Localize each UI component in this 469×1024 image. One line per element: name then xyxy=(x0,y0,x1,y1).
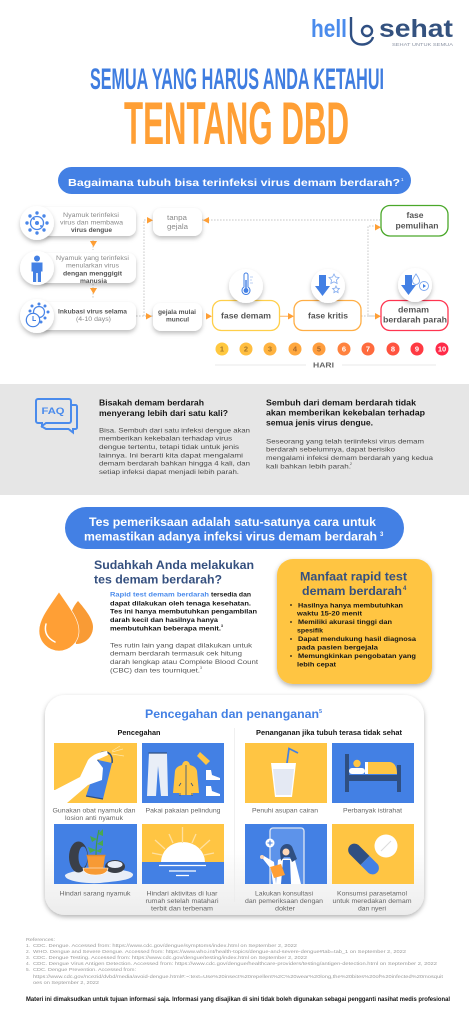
panel: manfaat rapid test: Memungkinkan pengobatan yang xyxy=(298,653,416,660)
text: rapid test: (CBC) dan tes tourniquet. xyxy=(110,668,200,674)
icon: thermometer xyxy=(229,269,263,303)
box: gejala mulai muncul: muncul xyxy=(166,316,189,324)
text: right statement: akan memberikan kekebalan terhadap xyxy=(266,408,425,418)
day timeline: 1 xyxy=(220,345,224,354)
text: left question: demam berdarah bahkan hingga 4 kali, dan xyxy=(99,461,250,468)
heading pill: infection: Bagaimana tubuh bisa terinfeksi virus demam berdarah? xyxy=(68,177,400,189)
panel: manfaat rapid test: Manfaat rapid test xyxy=(300,572,407,584)
panel: manfaat rapid test xyxy=(277,559,432,684)
panel: pencegahan dan penanganan: Penanganan jika tubuh terasa tidak sehat xyxy=(256,730,403,737)
panel: pencegahan dan penanganan xyxy=(45,695,424,915)
text: rapid test: 3 xyxy=(221,624,223,628)
references: WHO. Dengue and Severe Dengue. Accessed from: https://www.who.int/health-topics/dengue-and-severe-dengue#tab=tab_1 on September 2, 2022 xyxy=(33,949,406,955)
heading pill: test: memastikan adanya infeksi virus demam berdarah xyxy=(84,532,377,544)
captions xyxy=(52,807,412,912)
flow step: infected mosquito: virus dan membawa xyxy=(60,220,124,226)
illustration: doctor on phone xyxy=(245,824,327,884)
panel: manfaat rapid test: Dapat mendukung hasil diagnosa xyxy=(298,636,416,643)
box: fase demam xyxy=(212,300,280,330)
references: CDC. Dengue Prevention. Accessed from: xyxy=(33,967,136,973)
flow step: bite xyxy=(20,251,136,285)
captions: rumah setelah matahari xyxy=(146,898,218,905)
panel: manfaat rapid test: spesifik xyxy=(297,628,323,634)
illustration: pills xyxy=(332,824,414,884)
references: CDC. Dengue Virus Antigen Detection. Accessed from: https://www.cdc.gov/dengue/healthcare-providers/testing/antigen-detection.html on September 2, 2022 xyxy=(33,961,437,967)
icon: blood drops xyxy=(39,592,93,651)
panel: manfaat rapid test: 4 xyxy=(403,586,407,592)
title xyxy=(90,63,384,157)
box: tanpa gejala: tanpa xyxy=(167,215,187,222)
illustration: sunset xyxy=(142,824,224,884)
flow step: incubation: Inkubasi virus selama xyxy=(58,308,128,316)
captions: Gunakan obat nyamuk dan xyxy=(52,807,136,814)
illustration: tires and plant xyxy=(54,824,137,884)
day timeline: 4 xyxy=(293,345,298,354)
text: rapid test: tersedia dan xyxy=(211,591,251,598)
text: rapid test: 3 xyxy=(200,666,202,670)
day timeline: 5 xyxy=(317,345,321,354)
flow step: infected mosquito: virus dengue xyxy=(71,227,113,234)
heading: sudahkah: tes demam berdarah? xyxy=(94,574,222,586)
text: rapid test xyxy=(110,591,258,674)
flow step: bite: menularkan virus xyxy=(66,262,119,270)
text: rapid test: darah lengkap atau Complete Blood Count xyxy=(110,659,258,666)
references: 1. xyxy=(26,943,30,949)
references: 3. xyxy=(26,955,30,961)
flow step: bite: Nyamuk yang terinfeksi xyxy=(56,255,129,262)
panel: manfaat rapid test: waktu 15-20 menit xyxy=(296,610,363,618)
references: oes on September 2, 2022 xyxy=(33,980,99,986)
text: left question: dengue tertentu, tetapi tidak untuk jenis xyxy=(99,444,240,451)
box: fase pemulihan xyxy=(381,206,448,236)
box: fase demam: fase demam xyxy=(221,312,271,320)
arrows xyxy=(90,217,381,320)
box: gejala mulai muncul: gejala mulai xyxy=(158,309,196,316)
heading pill: infection: 1 xyxy=(401,177,404,182)
references: 5. xyxy=(26,967,30,973)
panel: manfaat rapid test: demam berdarah xyxy=(302,586,402,598)
logo: hello sehat: sehat xyxy=(379,15,454,43)
flow step: infected mosquito xyxy=(20,206,136,240)
heading pill: test: 3 xyxy=(380,532,384,538)
text: left question: menyerang lebih dari satu kali? xyxy=(99,409,228,418)
flow step: bite: dengan menggigit xyxy=(63,270,123,278)
panel: manfaat rapid test: lebih cepat xyxy=(297,662,337,668)
captions: terbit dan terbenam xyxy=(151,905,213,912)
text: rapid test: darah kecil dan hasilnya hanya xyxy=(110,617,218,624)
heading: pencegahan dan penanganan: 5 xyxy=(319,709,322,715)
panel: manfaat rapid test: pada pasien bergejala xyxy=(297,644,378,652)
box: tanpa gejala: gejala xyxy=(167,224,188,231)
illustration: glass of water xyxy=(245,743,327,803)
day timeline: 7 xyxy=(366,345,370,354)
references: https://www.cdc.gov/ncezid/dvbd/media/avoid-dengue.html#:~:text=Use%20insect%20repellent%2C%20wear%20long,the%20bites%20of%20infected%20mosquit xyxy=(33,974,444,980)
text: right statement: mengalami infeksi demam berdarah yang kedua xyxy=(266,455,433,462)
box: fase pemulihan: pemulihan xyxy=(396,222,439,230)
captions: Pakai pakaian pelindung xyxy=(146,807,221,814)
box: fase kritis: fase kritis xyxy=(308,312,349,320)
panel: manfaat rapid test: Memiliki akurasi tinggi dan xyxy=(298,619,392,626)
day timeline xyxy=(215,342,448,370)
heading pill: infection xyxy=(58,167,411,194)
icon: down arrow and stars xyxy=(311,269,345,303)
panel: FAQ band xyxy=(0,384,469,495)
box: demam berdarah parah: berdarah parah xyxy=(383,316,447,324)
icon: FAQ bubbles xyxy=(36,399,77,432)
references: References: xyxy=(26,937,55,943)
flow step: incubation: (4-10 days) xyxy=(76,316,111,323)
captions: losion anti nyamuk xyxy=(65,815,124,822)
text: right statement: Seseorang yang telah teriinfeksi virus demam xyxy=(266,438,424,445)
heading pill: test xyxy=(65,507,404,549)
flow connectors xyxy=(93,220,380,316)
heading pill: test: Tes pemeriksaan adalah satu-satunya cara untuk xyxy=(89,517,377,529)
text: rapid test: membutuhkan beberapa menit. xyxy=(110,626,221,632)
panel: pencegahan dan penanganan: Pencegahan xyxy=(118,730,160,737)
captions: Lakukan konsultasi xyxy=(255,890,313,898)
captions: Hindari aktivitas di luar xyxy=(146,890,218,898)
references xyxy=(26,937,444,986)
illustration: bed xyxy=(332,743,414,803)
box: gejala mulai muncul xyxy=(153,303,202,331)
logo: hello sehat: SEHAT UNTUK SEMUA xyxy=(392,42,453,47)
captions: Penuhi asupan cairan xyxy=(252,807,319,814)
icon: person xyxy=(32,256,42,282)
captions: untuk meredakan demam xyxy=(332,898,412,905)
text: left question: Bisa. Sembuh dari satu infeksi dengue akan xyxy=(99,427,250,434)
logo: hello sehat: hell xyxy=(311,15,347,43)
day timeline: 8 xyxy=(391,345,395,354)
text: left question: setiap infeksi dapat menjadi lebih parah. xyxy=(99,469,239,476)
text: left question: memberikan kekebalan terhadap virus xyxy=(99,436,233,442)
flow step: bite: manusia xyxy=(80,278,108,285)
box: demam berdarah parah xyxy=(381,300,448,330)
text: left question xyxy=(99,398,250,476)
heading: sudahkah xyxy=(94,560,254,586)
box: tanpa gejala xyxy=(153,208,202,236)
panel: manfaat rapid test: Hasilnya hanya membutuhkan xyxy=(298,602,403,609)
text: rapid test: Tes rutin lain yang dapat dilakukan untuk xyxy=(110,642,253,649)
box: fase pemulihan: fase xyxy=(406,211,424,220)
logo: hello sehat xyxy=(311,15,454,47)
day timeline: 2 xyxy=(244,345,248,354)
day timeline: 3 xyxy=(268,345,272,354)
text: rapid test: Rapid test demam berdarah xyxy=(110,591,209,598)
captions: Perbanyak istirahat xyxy=(343,807,402,814)
references: CDC. Dengue Testing. Accessed from: https://www.cdc.gov/dengue/testing/index.html on September 2, 2022 xyxy=(33,955,307,961)
disclaimer: Materi ini dimaksudkan untuk tujuan informasi saja. Informasi yang disajikan di sini tidak boleh digunakan sebagai pengganti nasihat medis profesional xyxy=(26,996,450,1003)
flow step: infected mosquito: Nyamuk terinfeksi xyxy=(63,212,119,219)
captions: dan pemeriksaan dengan xyxy=(245,898,324,905)
text: right statement: semua jenis virus dengue. xyxy=(266,418,373,428)
captions: dan nyeri xyxy=(358,905,386,912)
text: rapid test: dapat dilakukan oleh tenaga kesehatan. xyxy=(110,600,251,607)
day timeline: 10 xyxy=(438,345,446,354)
text: right statement: berdarah sebelumnya, dapat berisiko xyxy=(266,447,395,454)
text: right statement: 2 xyxy=(350,462,352,466)
day timeline: 9 xyxy=(415,345,419,354)
text: left question: Bisakah demam berdarah xyxy=(99,398,204,408)
heading: sudahkah: Sudahkah Anda melakukan xyxy=(94,560,254,572)
captions: dokter xyxy=(275,905,295,912)
references: CDC. Dengue. Accessed from: https://www.cdc.gov/dengue/symptoms/index.html on September 2, 2022 xyxy=(33,943,297,949)
text: left question: lainnya. Ini berarti kita dapat mengalami xyxy=(99,452,243,459)
box: demam berdarah parah: demam xyxy=(398,306,429,314)
day timeline: HARI xyxy=(313,362,334,370)
icon: arrow, drop and monitor xyxy=(398,268,432,302)
heading: pencegahan dan penanganan: Pencegahan dan penanganan xyxy=(145,707,319,721)
text: right statement: Sembuh dari demam berdarah tidak xyxy=(266,398,417,408)
panel: FAQ band: FAQ xyxy=(42,406,64,417)
text: right statement xyxy=(266,398,433,470)
illustration: repellent spray xyxy=(54,743,137,803)
references: 2. xyxy=(26,949,30,955)
icon: virus xyxy=(25,211,49,235)
icon: virus and clock xyxy=(26,302,50,327)
box: fase kritis xyxy=(294,300,361,330)
captions: Konsumsi parasetamol xyxy=(337,890,407,898)
text: right statement: kali bahkan lebih parah. xyxy=(266,463,351,470)
illustration: protective clothes xyxy=(142,743,224,803)
flow step: incubation xyxy=(20,299,136,333)
day timeline: 6 xyxy=(342,345,346,354)
text: rapid test: demam berdarah termasuk cek hitung xyxy=(110,651,242,658)
text: rapid test: Tes ini hanya membutuhkan pengambilan xyxy=(110,608,257,616)
captions: Hindari sarang nyamuk xyxy=(60,890,131,898)
references: 4. xyxy=(26,961,30,967)
